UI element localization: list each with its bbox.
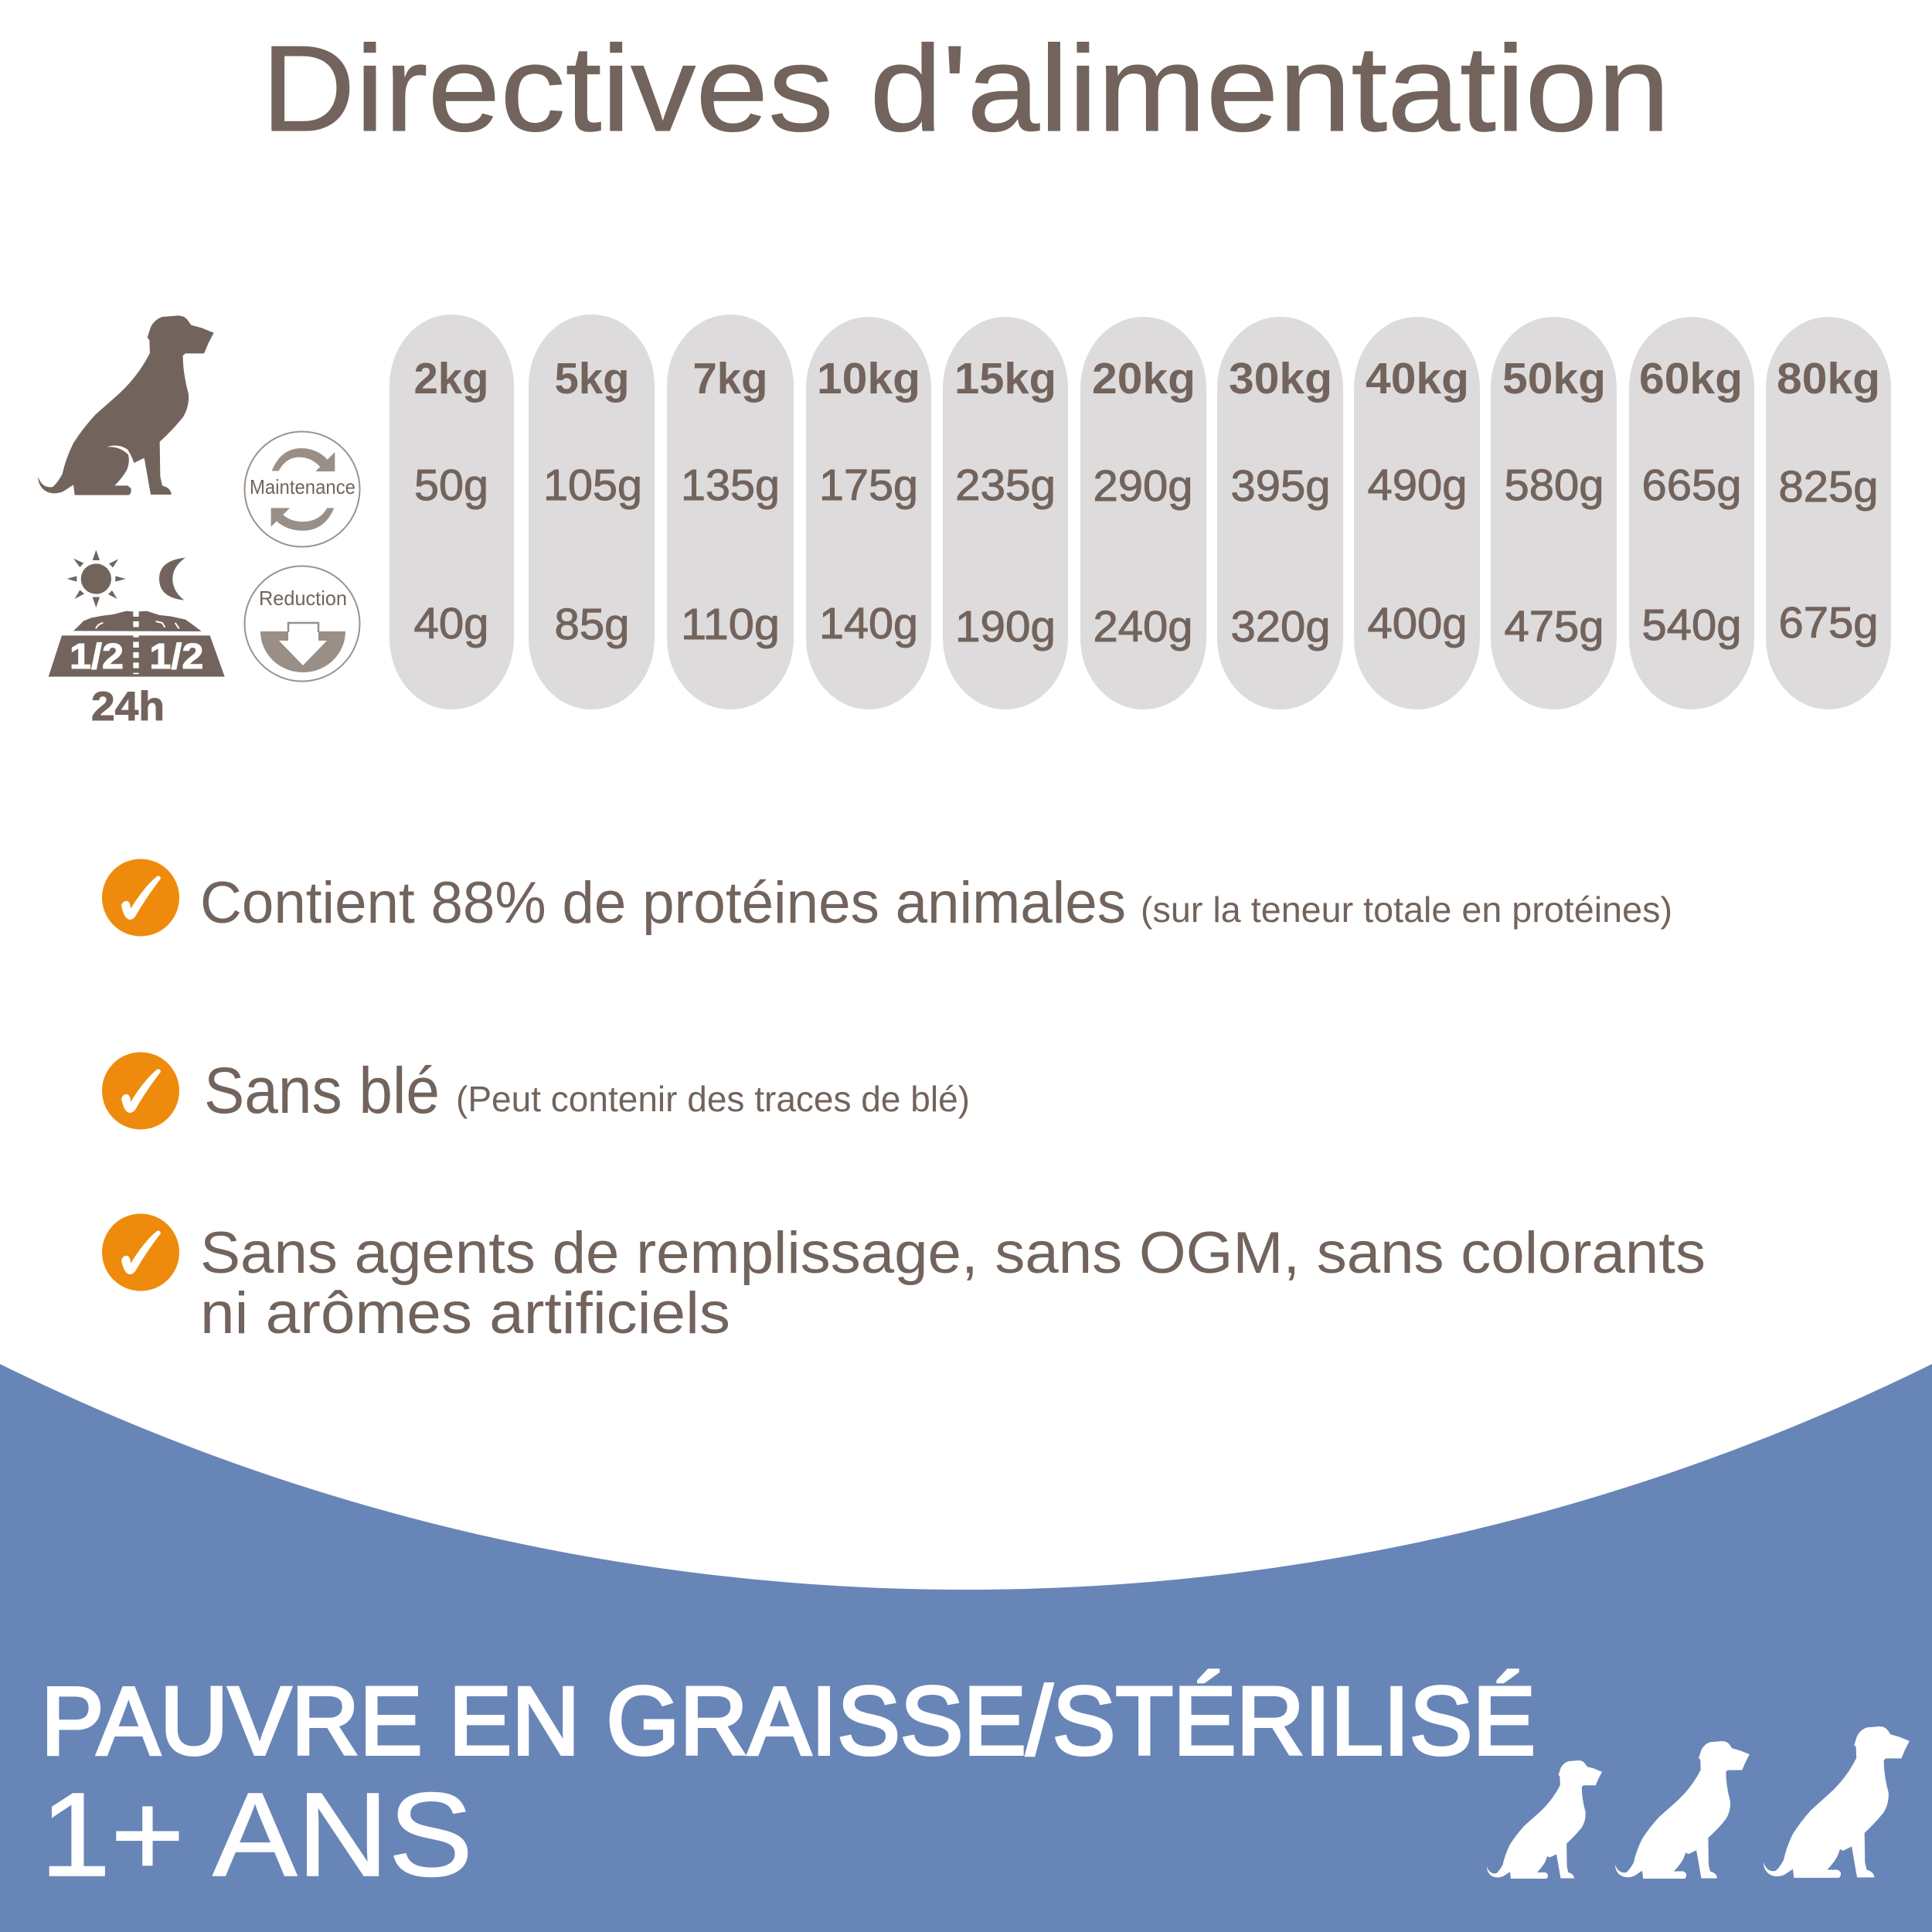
column: 15kg: 15kg <box>954 354 1056 403</box>
column: 30kg <box>1217 317 1343 709</box>
column: 20kg: 290g <box>1093 461 1193 511</box>
column: 80kg <box>1766 317 1891 709</box>
badge: maintenance <box>244 431 360 547</box>
column: 5kg: 5kg <box>555 354 629 403</box>
benefit: animal protein: (sur la teneur totale en protéines) <box>1141 889 1672 930</box>
icon: sun <box>67 550 126 607</box>
column: 10kg: 175g <box>819 461 918 510</box>
icon: day and night feeding bowl <box>49 550 225 677</box>
badge: reduction: Reduction <box>259 587 347 610</box>
column: 20kg: 20kg <box>1092 354 1196 403</box>
text: bowl left half: 1/2 <box>70 636 124 676</box>
benefit: wheat free: Sans blé <box>204 1054 440 1127</box>
icon: small dog <box>1487 1760 1602 1879</box>
icon: kibble mound <box>73 611 202 631</box>
column: 10kg <box>806 317 931 709</box>
column: 10kg: 10kg <box>817 354 920 403</box>
column: 7kg: 110g <box>681 600 780 649</box>
column: 50kg: 475g <box>1504 602 1604 651</box>
column: 20kg: 240g <box>1093 602 1193 651</box>
title: Directives d'alimentation <box>261 21 1670 157</box>
column: 15kg: 235g <box>955 461 1056 510</box>
column: 7kg: 7kg <box>692 354 768 403</box>
column: 15kg: 190g <box>955 602 1056 651</box>
column: 40kg: 40kg <box>1366 354 1469 403</box>
column: 15kg <box>943 317 1068 709</box>
column: 30kg: 395g <box>1230 461 1331 511</box>
benefit: wheat free <box>204 1054 970 1127</box>
column: 2kg: 2kg <box>414 354 488 403</box>
footer band <box>0 1364 1932 1932</box>
benefit: wheat free: (Peut contenir des traces de blé) <box>456 1079 970 1119</box>
column: 7kg <box>667 315 794 709</box>
benefit: animal protein <box>200 870 1672 936</box>
badge: reduction <box>244 566 360 682</box>
icon: medium dog <box>1615 1741 1750 1879</box>
badge: maintenance: Maintenance <box>250 475 355 498</box>
text: bowl right half: 1/2 <box>149 636 203 676</box>
column: 5kg: 85g <box>555 600 629 649</box>
footer heading: PAUVRE EN GRAISSE/STÉRILISÉ <box>41 1668 1536 1775</box>
column: 80kg: 825g <box>1779 462 1878 512</box>
icon: check 3 <box>102 1213 179 1291</box>
column: 80kg: 80kg <box>1777 354 1880 403</box>
column: 50kg <box>1491 317 1617 709</box>
column: 30kg: 30kg <box>1229 354 1332 403</box>
column: 5kg: 105g <box>543 461 642 510</box>
column: 7kg: 135g <box>681 461 780 510</box>
column: 2kg: 50g <box>414 461 488 510</box>
icon: check 2 <box>102 1053 179 1130</box>
column: 40kg: 400g <box>1368 599 1467 648</box>
label: 24h: 24h <box>91 684 165 730</box>
column: 30kg: 320g <box>1230 602 1331 651</box>
icon: bowl <box>49 635 225 677</box>
benefit: animal protein: Contient 88% de protéines animales <box>200 870 1126 936</box>
column: 60kg: 60kg <box>1639 354 1743 403</box>
column: 60kg: 665g <box>1641 461 1742 510</box>
icon: check 1 <box>102 859 179 937</box>
column: 2kg <box>389 315 514 709</box>
benefit: no fillers: ni arômes artificiels <box>200 1281 730 1346</box>
table: feeding quantities <box>389 315 1891 709</box>
column: 2kg: 40g <box>414 599 488 648</box>
column: 80kg: 675g <box>1779 598 1878 648</box>
icon: moon <box>159 558 185 600</box>
column: 60kg <box>1629 317 1754 709</box>
column: 5kg <box>529 315 655 709</box>
icon: sitting dog <box>38 315 214 495</box>
column: 50kg: 580g <box>1504 461 1604 510</box>
benefit: no fillers <box>200 1220 1706 1346</box>
column: 40kg <box>1354 317 1480 709</box>
benefit: no fillers: Sans agents de remplissage, sans OGM, sans colorants <box>200 1220 1706 1286</box>
column: 40kg: 490g <box>1368 461 1467 510</box>
icon: large dog <box>1764 1726 1910 1878</box>
column: 20kg <box>1080 317 1206 709</box>
footer age: 1+ ANS <box>40 1768 473 1901</box>
column: 50kg: 50kg <box>1502 354 1606 403</box>
column: 10kg: 140g <box>819 599 918 648</box>
column: 60kg: 540g <box>1641 600 1742 650</box>
